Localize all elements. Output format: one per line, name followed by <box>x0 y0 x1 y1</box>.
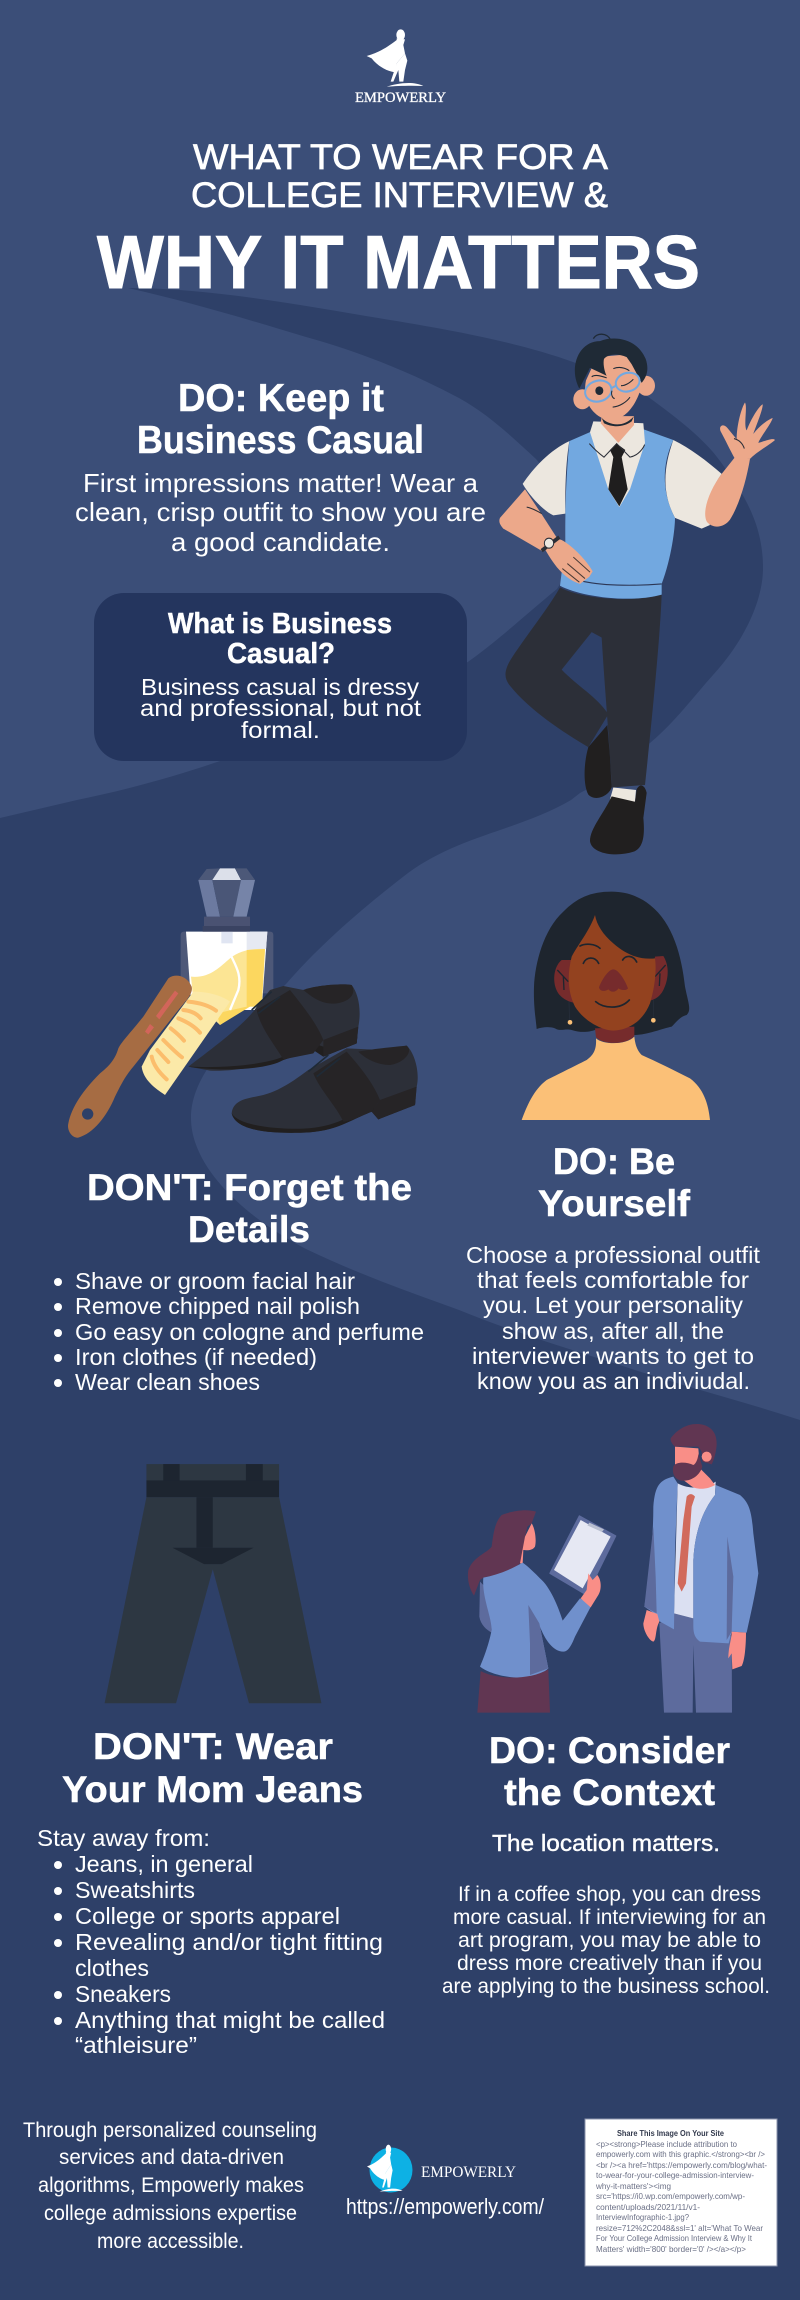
heading: keep it business casual: DO: Keep it <box>178 377 384 420</box>
heading: consider the context: the Context <box>504 1772 715 1813</box>
logo: Empowerly footer with URL <box>346 2145 545 2219</box>
heading: mom jeans: Your Mom Jeans <box>62 1769 363 1810</box>
title: WHAT TO WEAR FOR A <box>193 137 608 177</box>
callout: what is business casual: Casual? <box>227 638 335 670</box>
text block: first impressions: First impressions matter! Wear a <box>83 468 479 498</box>
heading: consider the context: DO: Consider <box>489 1730 730 1771</box>
list: clothing to avoid: clothes <box>75 1955 149 1981</box>
text block: be yourself <box>466 1242 761 1394</box>
heading: consider the context <box>489 1730 730 1813</box>
panel: DON'T wear your mom jeans <box>37 1464 385 2058</box>
text block: be yourself: show as, after all, the <box>502 1318 724 1344</box>
panel: DON'T forget the details <box>54 868 424 1395</box>
icon: perfume bottle, brush and shoes <box>68 868 418 1138</box>
icon: waving man in blue vest <box>499 334 775 854</box>
title: COLLEGE INTERVIEW & <box>191 175 608 215</box>
text block: about Empowerly: services and data-driven <box>59 2146 284 2169</box>
list: details checklist: Remove chipped nail polish <box>75 1293 360 1319</box>
callout: what is business casual: formal. <box>241 717 320 743</box>
panel: share this image embed code: src='https://i0.wp.com/empowerly.com/wp- <box>596 2191 745 2201</box>
heading: forget the details: Details <box>188 1209 310 1250</box>
panel: share this image embed code: to-wear-for-your-college-admission-interview- <box>596 2170 754 2180</box>
panel: share this image embed code: empowerly.com with this graphic.</strong><br /> <box>596 2149 765 2159</box>
panel: share this image embed code: resize=712%2C2048&ssl=1' alt='What To Wear <box>596 2223 763 2233</box>
heading: be yourself <box>538 1141 691 1224</box>
text block: be yourself: know you as an indiviudal. <box>477 1368 750 1394</box>
text block: first impressions: a good candidate. <box>171 527 390 557</box>
text block: location matters: The location matters. <box>492 1830 720 1856</box>
list: clothing to avoid: College or sports apparel <box>75 1903 340 1929</box>
logo: Empowerly footer with URL: EMPOWERLY <box>421 2164 516 2181</box>
panel: share this image embed code: For Your College Admission Interview & Why It <box>596 2233 753 2243</box>
heading: be yourself: DO: Be <box>553 1141 675 1182</box>
list: details checklist: Go easy on cologne and perfume <box>75 1319 424 1345</box>
list: clothing to avoid: Stay away from: <box>37 1825 210 1851</box>
icon: dark trousers <box>105 1464 321 1703</box>
icon: smiling woman <box>522 892 710 1120</box>
list: details checklist: Wear clean shoes <box>75 1369 260 1395</box>
callout: what is business casual: and professional, but not <box>140 695 421 721</box>
text block: about Empowerly: Through personalized counseling <box>23 2119 317 2142</box>
heading: forget the details <box>87 1167 412 1250</box>
panel: share this image embed code: <p><strong>Please include attribution to <box>596 2139 737 2149</box>
heading: forget the details: DON'T: Forget the <box>87 1167 412 1208</box>
panel: DO keep it business casual <box>75 377 486 761</box>
panel: share this image embed code: InterviewInfographic-1.jpg? <box>596 2212 689 2222</box>
list: clothing to avoid: “athleisure” <box>75 2032 197 2058</box>
text block: location matters: dress more creatively than if you <box>457 1952 762 1975</box>
icon: two professionals talking <box>468 1424 758 1713</box>
text block: about Empowerly: college admissions expertise <box>44 2202 297 2225</box>
text block: about Empowerly: more accessible. <box>97 2230 244 2253</box>
heading: keep it business casual <box>137 377 424 462</box>
logo: Empowerly footer with URL: https://empowerly.com/ <box>346 2194 545 2219</box>
text block: location matters: more casual. If interviewing for an <box>453 1906 766 1929</box>
text block: about Empowerly: algorithms, Empowerly makes <box>38 2174 304 2197</box>
panel: share this image embed code: <br /><a href='https://empowerly.com/blog/what- <box>596 2160 767 2170</box>
text block: be yourself: you. Let your personality <box>483 1292 744 1318</box>
heading: be yourself: Yourself <box>538 1183 691 1224</box>
callout: what is business casual <box>94 593 467 761</box>
panel: share this image embed code: Share This Image On Your Site <box>617 2128 724 2138</box>
logo: Empowerly header <box>355 29 447 106</box>
callout: what is business casual: What is Business <box>168 608 392 640</box>
text block: be yourself: Choose a professional outfit <box>466 1242 761 1268</box>
text block: location matters: art program, you may be able to <box>458 1929 761 1952</box>
text block: first impressions <box>75 468 486 557</box>
title: WHY IT MATTERS <box>97 220 700 304</box>
panel: share this image embed code: content/uploads/2021/11/v1- <box>596 2202 700 2212</box>
text block: first impressions: clean, crisp outfit to show you are <box>75 497 486 527</box>
text block: location matters: are applying to the business school. <box>442 1975 770 1998</box>
heading: mom jeans: DON'T: Wear <box>93 1726 333 1767</box>
list: details checklist: Shave or groom facial hair <box>75 1268 355 1294</box>
logo: Empowerly header: EMPOWERLY <box>355 90 447 106</box>
text block: be yourself: interviewer wants to get to <box>472 1343 754 1369</box>
panel: share this image embed code <box>585 2119 777 2266</box>
list: clothing to avoid: Jeans, in general <box>75 1851 253 1877</box>
text block: about Empowerly <box>23 2119 317 2253</box>
title <box>97 137 700 304</box>
heading: keep it business casual: Business Casual <box>137 419 424 462</box>
list: details checklist: Iron clothes (if needed) <box>75 1344 317 1370</box>
list: clothing to avoid: Sneakers <box>75 1981 171 2007</box>
list: clothing to avoid <box>37 1825 385 2058</box>
list: clothing to avoid: Anything that might be called <box>75 2007 385 2033</box>
panel: share this image embed code: Matters' width='800' border='0' /></a></p> <box>596 2244 746 2254</box>
list: clothing to avoid: Sweatshirts <box>75 1877 195 1903</box>
panel: share this image embed code: why-it-matters'><img <box>595 2181 671 2191</box>
list: details checklist <box>54 1268 424 1395</box>
heading: mom jeans <box>62 1726 363 1810</box>
text block: location matters: If in a coffee shop, you can dress <box>458 1883 761 1906</box>
text block: be yourself: that feels comfortable for <box>477 1267 749 1293</box>
panel: DO be yourself <box>466 892 761 1394</box>
callout: what is business casual: Business casual is dressy <box>141 674 419 700</box>
list: clothing to avoid: Revealing and/or tight fitting <box>75 1929 383 1955</box>
text block: location matters <box>442 1830 770 1998</box>
panel: DO consider the context <box>442 1424 770 1998</box>
